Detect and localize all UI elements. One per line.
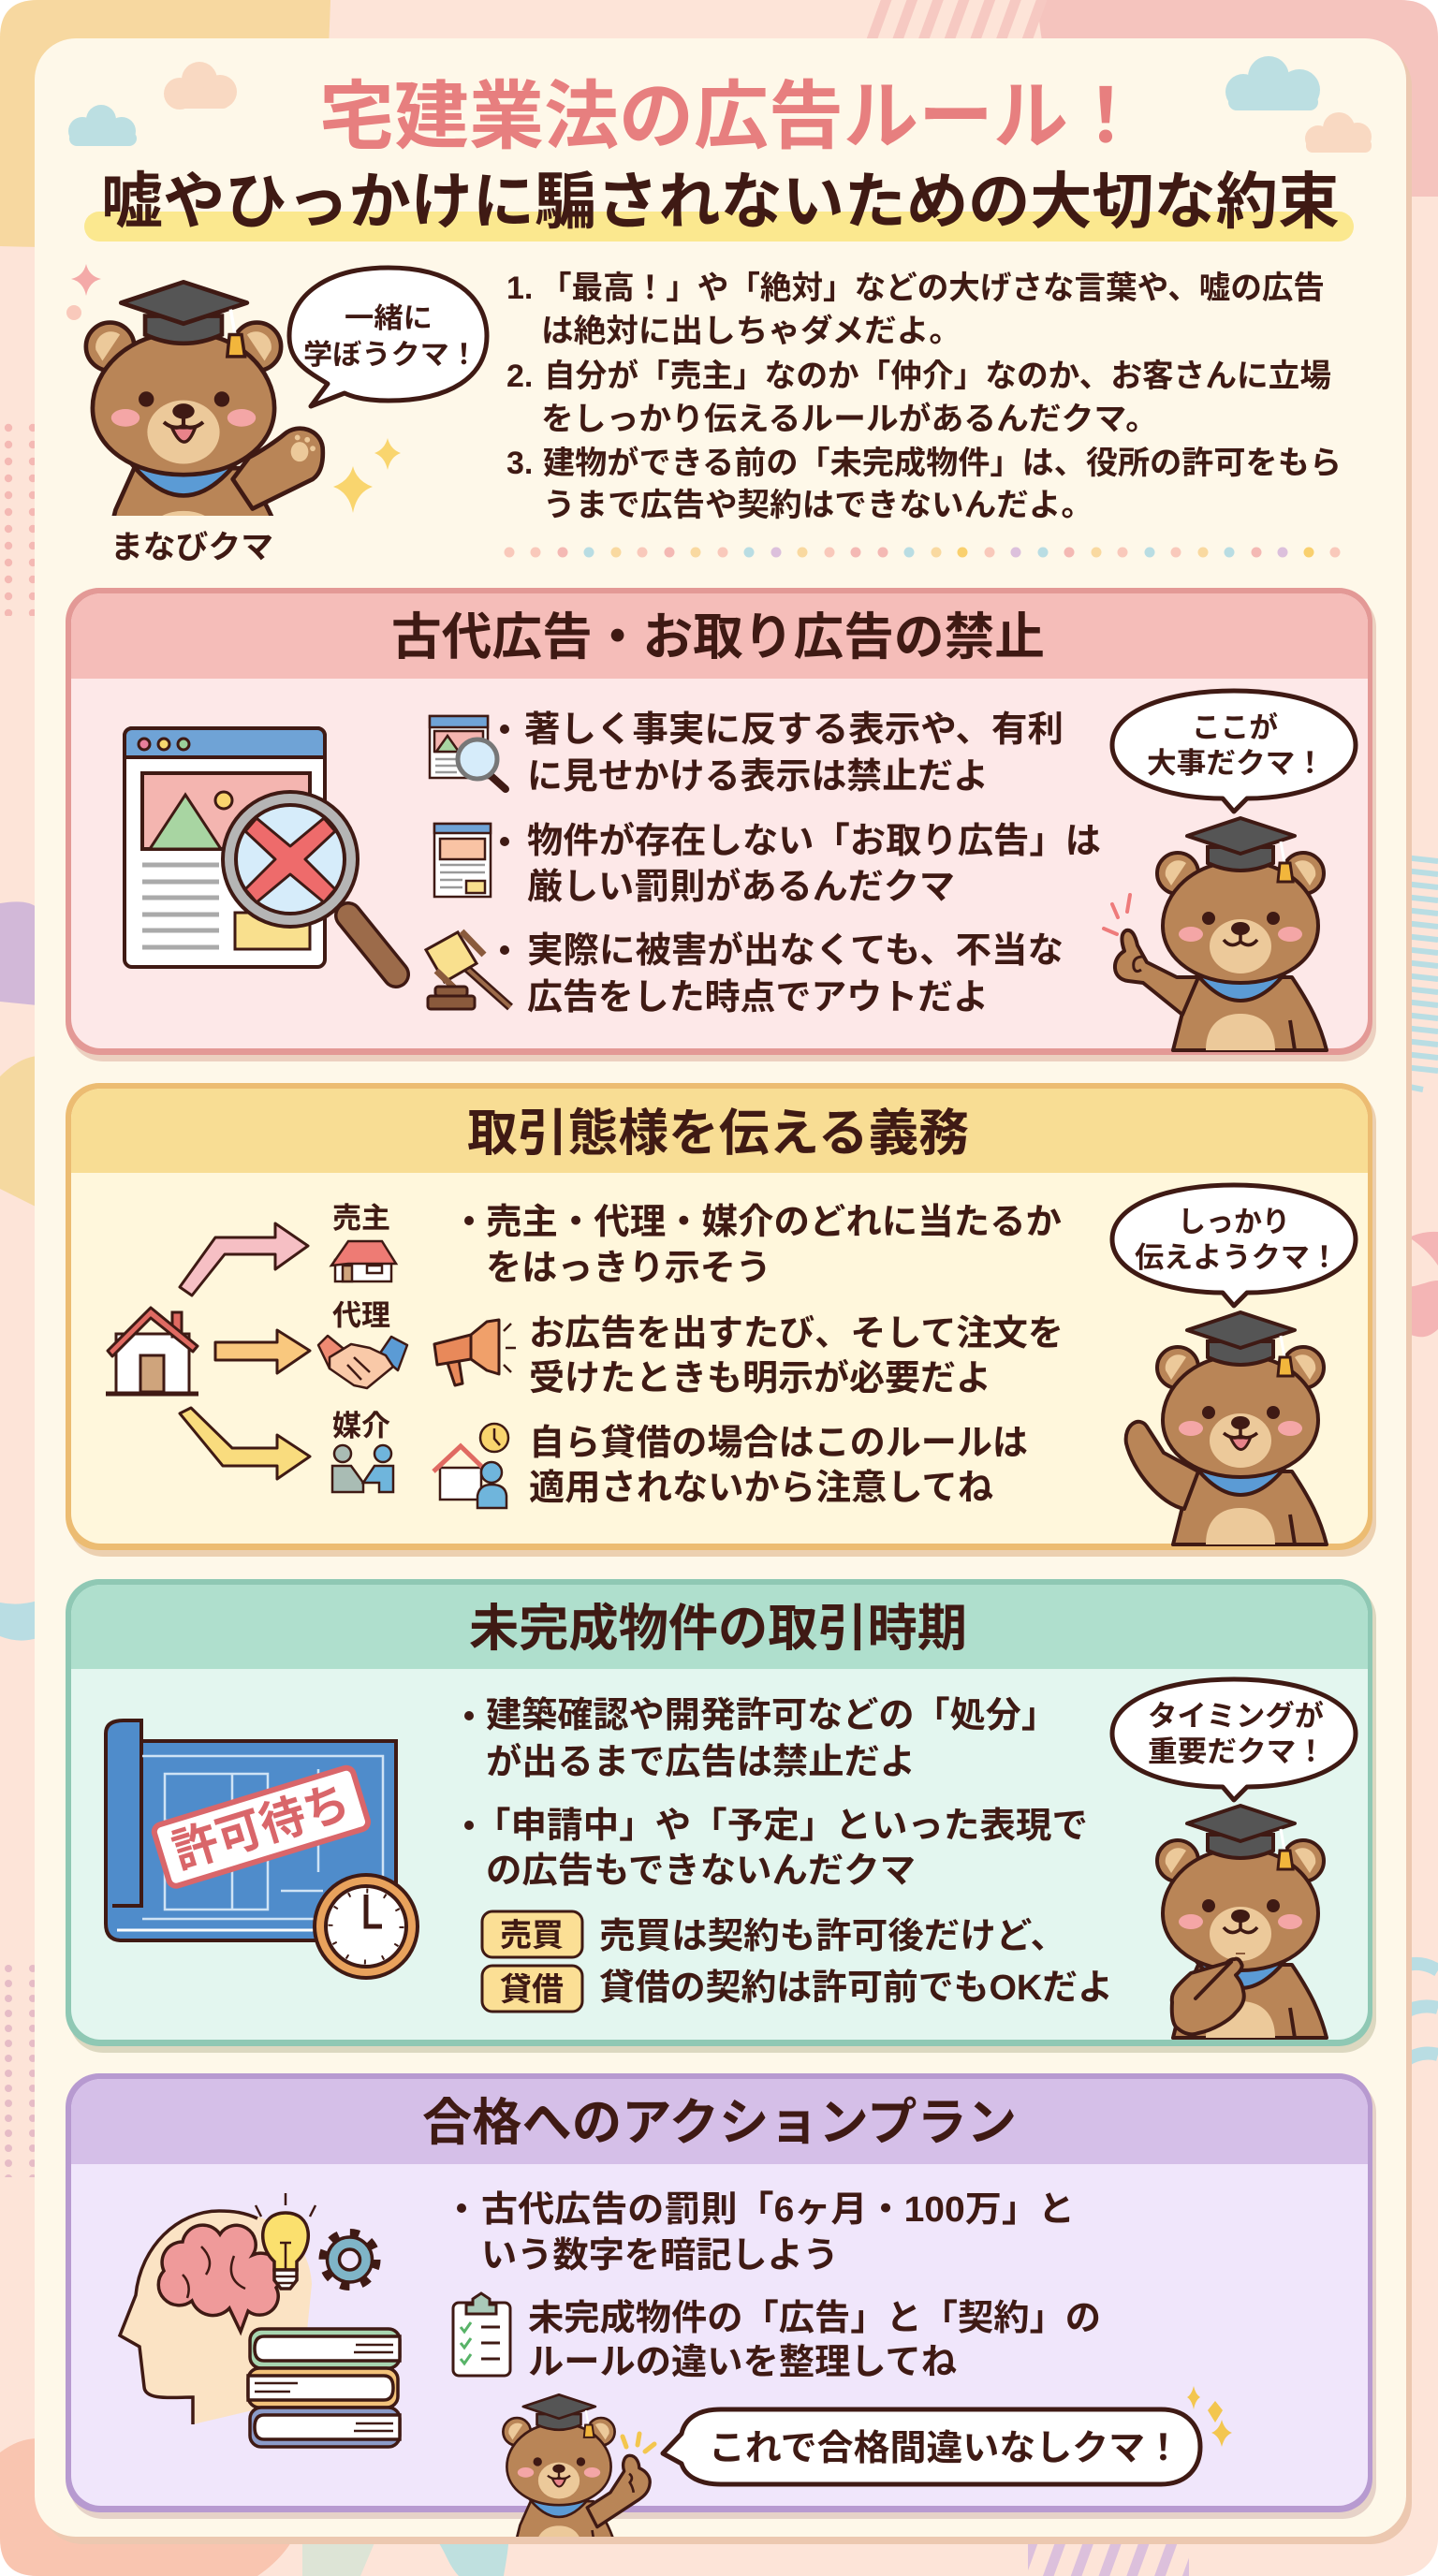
decorative clouds — [68, 56, 1372, 153]
tag text: 売買は契約も許可後だけど、 — [599, 1917, 1066, 1956]
bear pointing — [1104, 818, 1327, 1050]
intro numbered list: うまで広告や契約はできないんだよ。 — [543, 488, 1093, 523]
speech bubble: final message: これで合格間違いなしクマ！ — [709, 2429, 1181, 2468]
bullet text: 受けたときも明示が必要だよ — [529, 1359, 991, 1398]
heading: 未完成物件の取引時期 — [469, 1601, 967, 1657]
mascot name: まなびクマ — [110, 530, 273, 565]
label: 売主: 売主 — [332, 1202, 390, 1235]
panel: 取引態様を伝える義務 — [66, 1083, 1376, 1557]
arrow: to agent — [215, 1330, 310, 1373]
bullet text: 著しく事実に反する表示や、有利 — [524, 710, 1064, 750]
speech bubble — [1112, 691, 1356, 812]
bullet text: 売主・代理・媒介のどれに当たるか — [486, 1203, 1062, 1242]
sparkle ticks by paw — [623, 2434, 654, 2452]
bullet text: 未完成物件の「広告」と「契約」の — [528, 2299, 1101, 2338]
bullet text — [464, 1696, 1088, 1891]
illustration: head, brain, bulb, gear, books — [120, 2193, 400, 2447]
icon: house clock person — [433, 1424, 508, 1508]
icon: main house — [106, 1308, 198, 1394]
intro numbered list: 3. — [506, 446, 533, 481]
arrow: to seller — [180, 1223, 308, 1295]
speech bubble: しっかり — [1178, 1206, 1290, 1238]
speech bubble: intro: 一緒に — [345, 303, 433, 334]
icon: small house — [331, 1241, 396, 1281]
speech bubble: final message — [663, 2409, 1200, 2484]
bullet text: ルールの違いを整理してね — [528, 2343, 957, 2382]
intro numbered list: 建物ができる前の「未完成物件」は、役所の許可をもら — [543, 445, 1342, 481]
speech bubble: intro — [289, 268, 487, 406]
bullet text: 実際に被害が出なくても、不当な — [527, 931, 1064, 971]
bullet text: をはっきり示そう — [486, 1249, 771, 1288]
bullet text: 厳しい罰則があるんだクマ — [527, 868, 955, 907]
title: 宅建業法の広告ルール！ — [319, 75, 1143, 158]
tag text — [599, 1917, 1113, 2008]
stamp: 許可待ち — [167, 1776, 356, 1879]
bullet text: 物件が存在しない「お取り広告」は — [527, 822, 1101, 861]
panel: 古代広告・お取り広告の禁止 — [66, 588, 1376, 1061]
icon: gavel — [419, 926, 510, 1009]
tag text: 貸借の契約は許可前でもOKだよ — [599, 1969, 1113, 2008]
tag: 売買 — [482, 1911, 582, 1957]
icon: people — [332, 1445, 393, 1492]
subtitle with highlight: 嘘やひっかけに騙されないための大切な約束 — [101, 167, 1340, 236]
heading: 取引態様を伝える義務 — [467, 1105, 969, 1162]
speech bubble: 重要だクマ！ — [1148, 1735, 1326, 1768]
intro numbered list: 自分が「売主」なのか「仲介」なのか、お客さんに立場 — [544, 358, 1331, 394]
bullet text: いう数字を暗記しよう — [481, 2236, 839, 2276]
tag: 貸借: 貸借 — [500, 1972, 564, 2008]
icon: megaphone — [434, 1320, 516, 1385]
bullet text: 自ら貸借の場合はこのルールは — [529, 1424, 1028, 1463]
sparkles: gold — [1187, 2386, 1232, 2447]
bullet text — [464, 1203, 1064, 1508]
bullet text: の広告もできないんだクマ — [486, 1852, 916, 1891]
label: 代理: 代理 — [332, 1299, 390, 1332]
bullet text: 広告をした時点でアウトだよ — [527, 978, 989, 1017]
bear waving — [1126, 1312, 1327, 1544]
bear thinking — [1157, 1806, 1327, 2038]
heading: 合格へのアクションプラン — [422, 2095, 1017, 2151]
intro numbered list: は絶対に出しちゃダメだよ。 — [541, 313, 961, 349]
bear thumbs up — [503, 2394, 650, 2550]
illustration: blueprint — [106, 1720, 418, 1978]
speech bubble: ここが — [1192, 711, 1278, 744]
tag: 貸借 — [482, 1966, 582, 2012]
sparkles — [66, 264, 401, 513]
bullet text: 適用されないから注意してね — [529, 1469, 993, 1508]
bullet text — [500, 710, 1101, 1017]
speech bubble: タイミングが — [1148, 1700, 1324, 1733]
speech bubble: 大事だクマ！ — [1147, 747, 1325, 780]
label: 媒介: 媒介 — [332, 1410, 390, 1442]
panel: 未完成物件の取引時期 — [66, 1579, 1376, 2053]
intro numbered list — [506, 271, 1342, 523]
speech bubble: 伝えようクマ！ — [1135, 1241, 1339, 1274]
panel: 合格へのアクションプラン — [66, 2073, 1376, 2519]
speech bubble — [1112, 1185, 1356, 1306]
speech bubble — [1112, 1679, 1356, 1800]
icon: clipboard — [453, 2293, 510, 2376]
bullet text: に見せかける表示は禁止だよ — [527, 757, 989, 797]
bullet text: が出るまで広告は禁止だよ — [486, 1743, 916, 1782]
tag: 売買: 売買 — [500, 1918, 564, 1954]
intro numbered list: 2. — [506, 359, 533, 394]
illustration: browser with magnifier — [125, 728, 396, 974]
intro numbered list: 1. — [506, 271, 533, 306]
icon: browser magnifier — [430, 716, 506, 789]
intro numbered list: をしっかり伝えるルールがあるんだクマ。 — [541, 401, 1158, 437]
bullet text: 「申請中」や「予定」といった表現で — [475, 1807, 1088, 1846]
icon: handshake — [318, 1336, 407, 1388]
icon: flyer — [434, 824, 491, 897]
heading: 古代広告・お取り広告の禁止 — [391, 609, 1045, 666]
bullet text: お広告を出すたび、そして注文を — [529, 1314, 1064, 1354]
bullet text — [457, 2190, 1101, 2382]
intro mascot bear — [66, 264, 401, 516]
bullet text: 古代広告の罰則「6ヶ月・100万」と — [481, 2190, 1075, 2230]
intro numbered list: 「最高！」や「絶対」などの大げさな言葉や、嘘の広告 — [540, 271, 1325, 306]
dotted divider — [504, 547, 1341, 558]
arrow: to broker — [180, 1408, 310, 1479]
bullet text: 建築確認や開発許可などの「処分」 — [486, 1696, 1057, 1735]
speech bubble: intro: 学ぼうクマ！ — [303, 340, 478, 371]
